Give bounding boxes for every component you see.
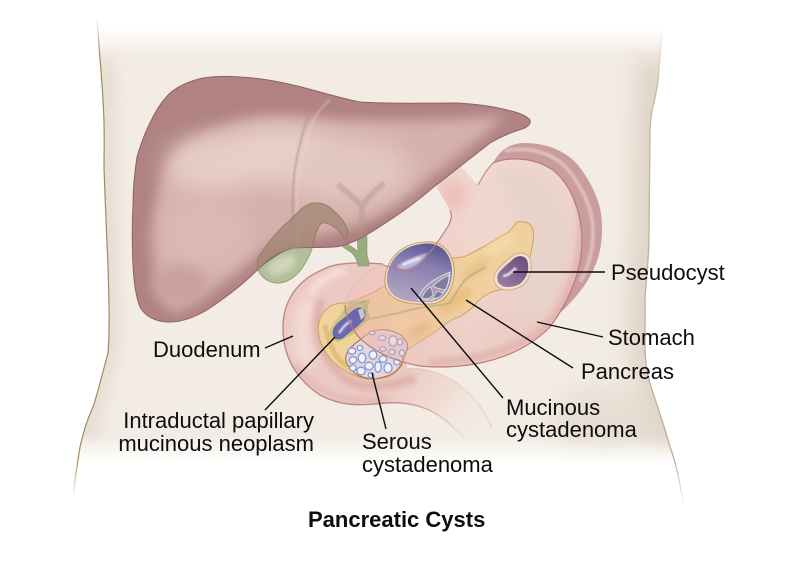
mucinous cystadenoma: [385, 242, 454, 304]
stomach body: [345, 159, 582, 367]
cyst loculi: [418, 272, 450, 300]
intrahepatic bile ducts: [336, 181, 386, 222]
duodenum and small intestine: [283, 263, 492, 452]
label: Serous cystadenoma: Serous: [362, 429, 432, 454]
gallbladder lower part: [258, 240, 312, 283]
label: Stomach: Stomach: [608, 325, 695, 350]
gallbladder neck seen through liver: [257, 203, 348, 270]
label: Serous cystadenoma: cystadenoma: [362, 452, 494, 477]
label: Intraductal papillary mucinous neoplasm: Intraductal papillary: [123, 408, 314, 433]
label: Mucinous cystadenoma: cystadenoma: [506, 417, 638, 442]
title: Pancreatic Cysts: [308, 507, 485, 532]
liver: [132, 76, 530, 322]
serous cystadenoma: [346, 330, 407, 379]
label: Intraductal papillary mucinous neoplasm: mucinous neoplasm: [118, 431, 314, 456]
torso background: [73, 17, 684, 507]
stomach translucent overlay: [345, 159, 582, 367]
pancreatic duct: [363, 267, 486, 322]
common bile duct: [339, 236, 369, 266]
label: Pseudocyst: Pseudocyst: [611, 260, 725, 285]
label: Duodenum: Duodenum: [153, 337, 261, 362]
label: Pancreas: Pancreas: [581, 359, 674, 384]
stomach outline: [345, 159, 582, 367]
intraductal papillary mucinous neoplasm: [330, 300, 370, 342]
label: Mucinous cystadenoma: Mucinous: [506, 395, 600, 420]
stomach: [345, 143, 602, 367]
stomach fundus: [493, 143, 602, 328]
pancreas: [318, 222, 534, 379]
leader lines: [265, 272, 605, 429]
pseudocyst: [494, 253, 531, 290]
